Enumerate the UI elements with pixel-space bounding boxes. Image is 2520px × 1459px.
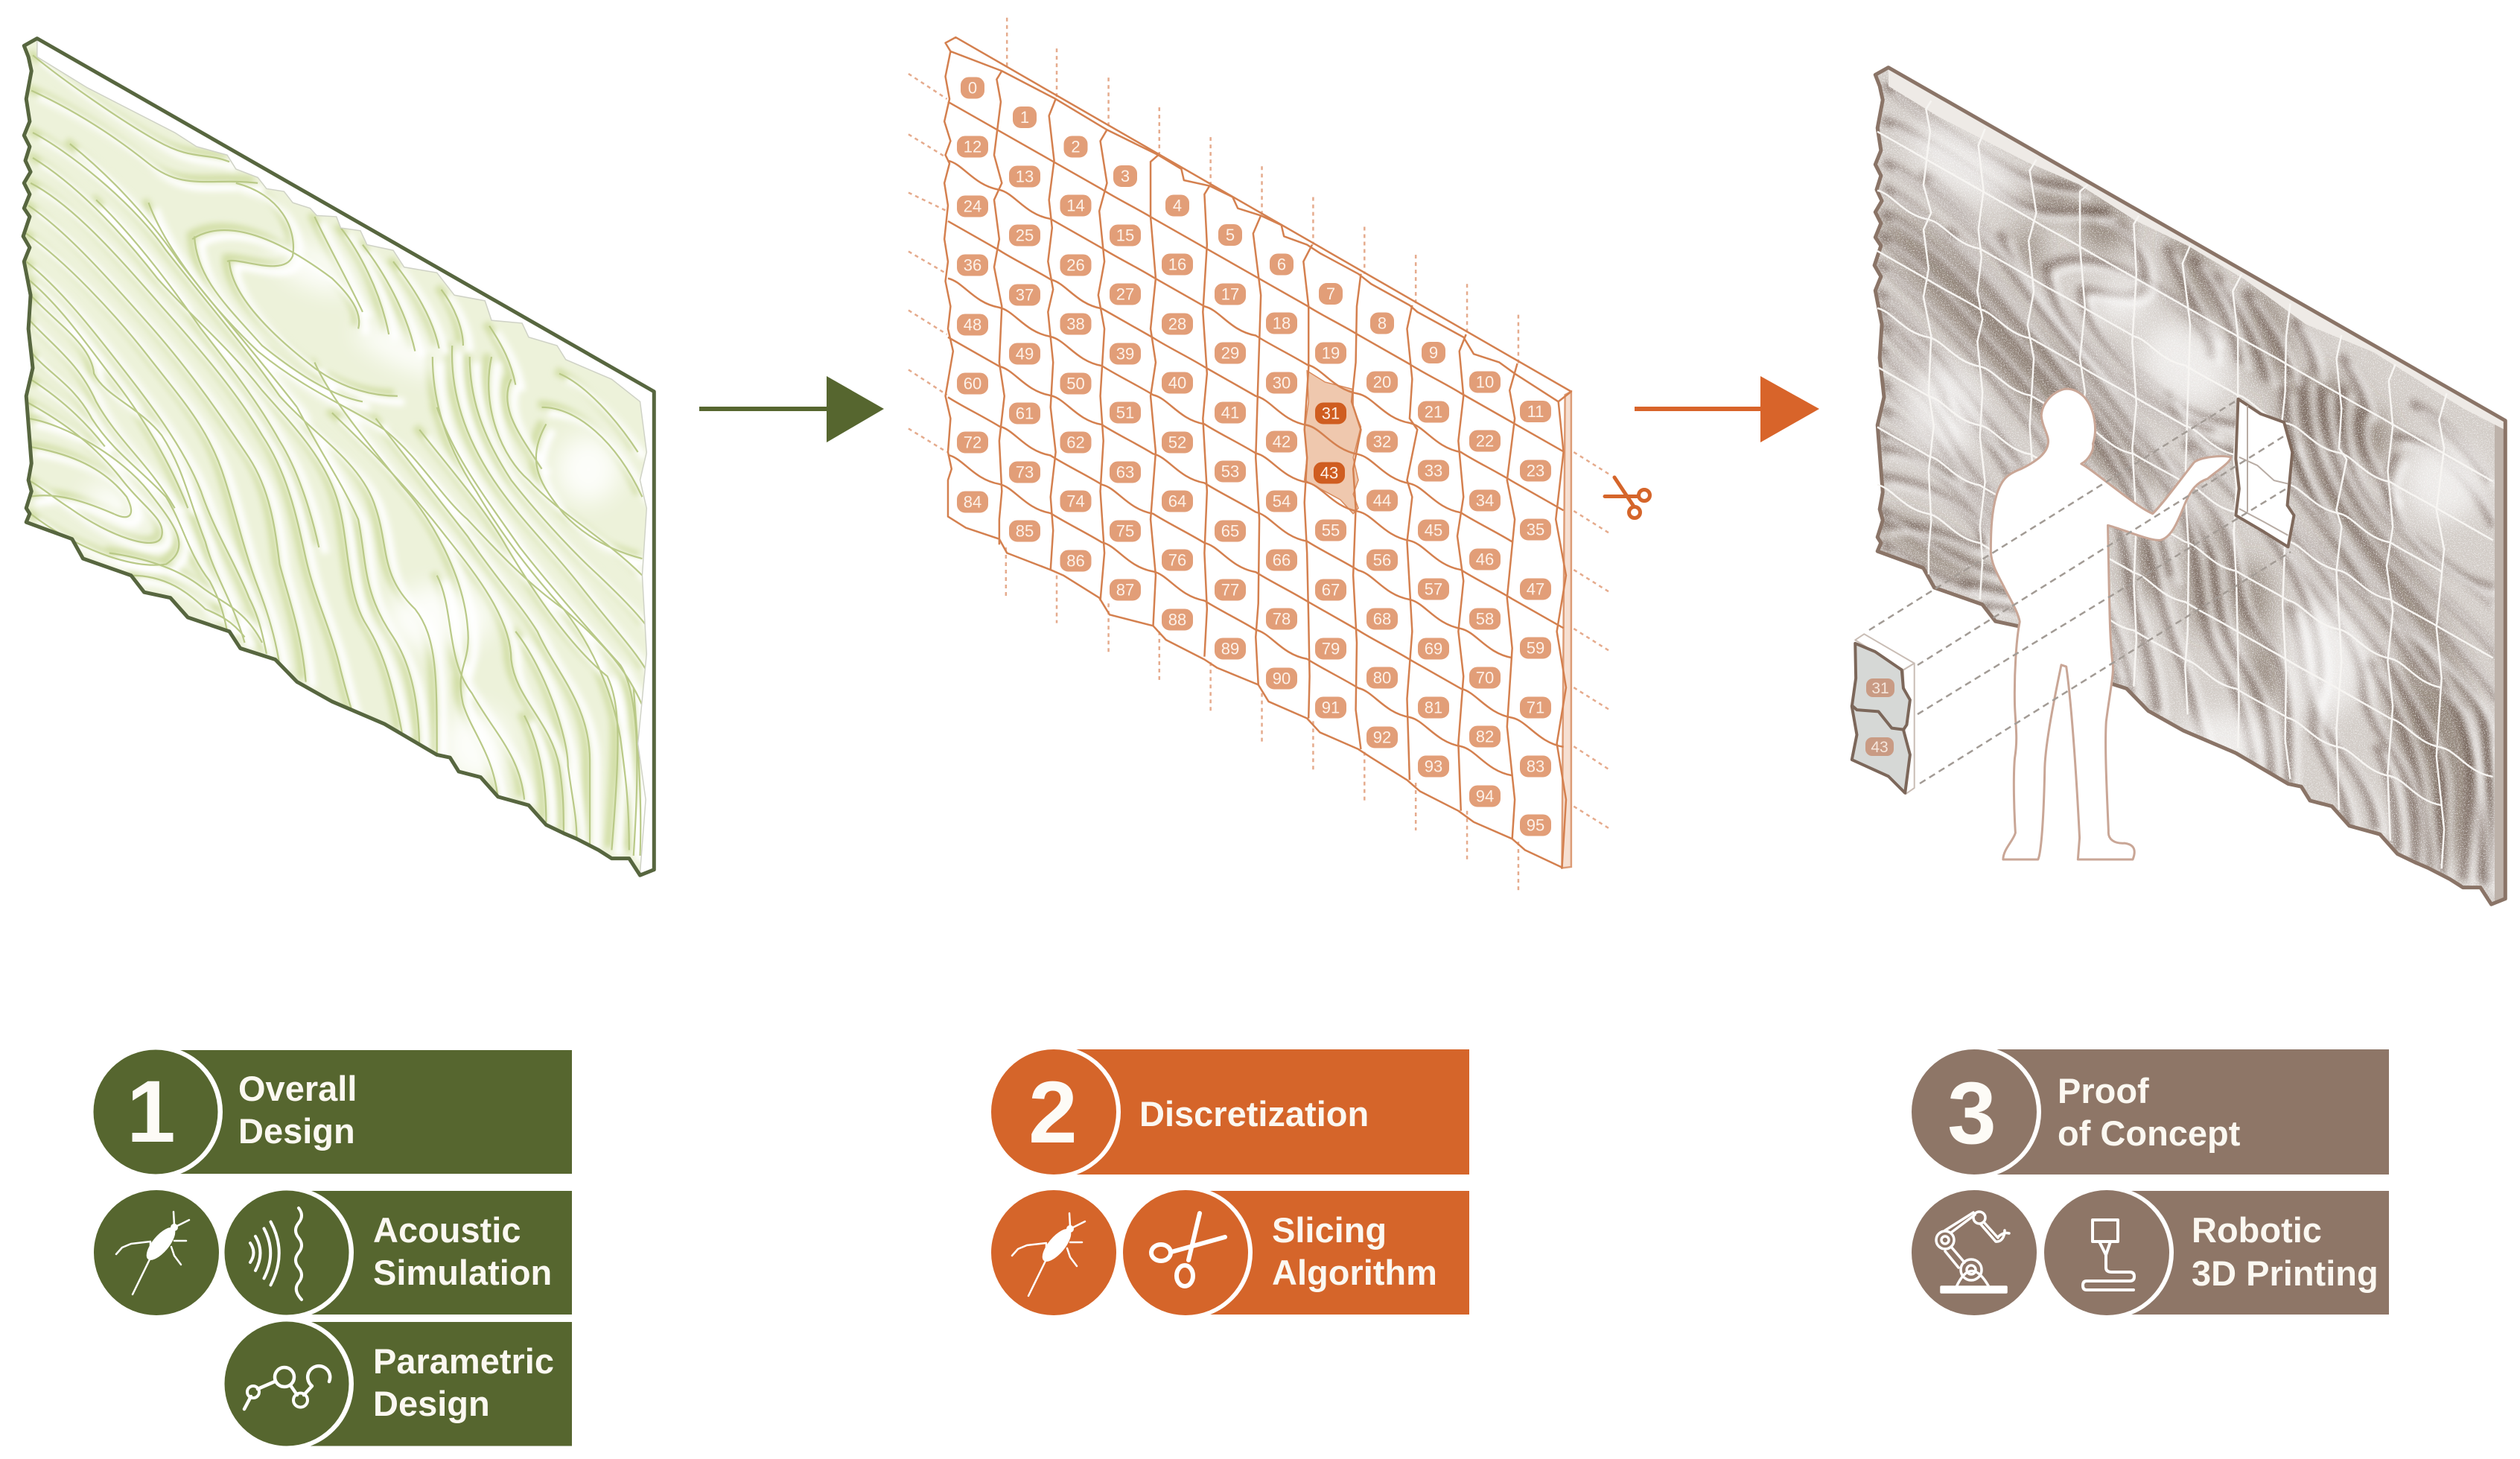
wall outline	[1874, 68, 2505, 904]
numbered panel labels: 56	[1373, 551, 1391, 569]
numbered panel labels: 45	[1425, 521, 1442, 539]
numbered panel labels: 79	[1322, 639, 1340, 658]
pale top strip	[37, 39, 655, 878]
numbered panel labels: 89	[1221, 639, 1239, 658]
bar: slicing algorithm: Slicing	[1272, 1210, 1387, 1250]
soft green shading beside contours	[22, 52, 643, 853]
bar: proof of concept: Proof	[2058, 1071, 2149, 1110]
bar: slicing algorithm	[1120, 1186, 1469, 1319]
bar: discretization: Discretization	[1139, 1094, 1369, 1134]
numbered panel labels: 95	[1527, 816, 1544, 834]
numbered panel labels: 46	[1476, 550, 1494, 569]
numbered panel labels: 31	[1322, 404, 1340, 423]
legend group 2: discretization	[988, 1046, 1469, 1319]
numbered panel labels: 37	[1016, 286, 1034, 304]
numbered panel labels: 84	[964, 493, 981, 511]
numbered panel labels: 1	[1020, 108, 1029, 127]
numbered panel labels: 39	[1116, 344, 1134, 363]
numbered panel labels: 49	[1016, 344, 1034, 363]
numbered panel labels: 87	[1116, 581, 1134, 599]
pale top strip	[1889, 68, 2507, 430]
extracted panels 31 and 43 block: 43	[1871, 739, 1889, 756]
numbered panel labels: 0	[968, 79, 977, 97]
numbered panel labels: 32	[1373, 432, 1391, 451]
numbered panel labels: 61	[1016, 404, 1034, 423]
numbered panel labels: 8	[1378, 314, 1387, 332]
numbered panel labels	[958, 77, 1550, 836]
numbered panel labels: 24	[964, 197, 981, 216]
numbered panel labels: 82	[1476, 727, 1494, 746]
dashed projection lines	[1869, 399, 2291, 783]
numbered panel labels: 76	[1168, 551, 1186, 569]
numbered panel labels: 72	[964, 433, 981, 451]
window left by removed panels	[2236, 399, 2294, 547]
numbered panel labels: 16	[1168, 255, 1186, 274]
numbered panel labels: 55	[1322, 521, 1340, 539]
numbered panel labels: 21	[1425, 402, 1442, 422]
numbered panel labels: 42	[1273, 432, 1291, 451]
numbered panel labels: 75	[1116, 521, 1134, 541]
light swirl ridges	[33, 61, 653, 862]
arrow: green	[699, 376, 884, 442]
green contour lines	[26, 55, 646, 856]
numbered panel labels: 22	[1476, 432, 1494, 450]
numbered panel labels: 93	[1425, 757, 1442, 776]
numbered panel labels: 2	[1071, 137, 1081, 156]
broad dark shaded zones	[1864, 177, 2476, 868]
wall outline	[23, 39, 654, 875]
numbered panel labels: 6	[1277, 255, 1286, 274]
numbered panel labels: 7	[1326, 285, 1335, 303]
numbered panel labels: 3	[1121, 167, 1130, 185]
bar: acoustic simulation: Acoustic	[373, 1210, 521, 1250]
dark shaded ridges	[1877, 84, 2498, 885]
bar: robotic 3d printing: 3D Printing	[2192, 1253, 2379, 1293]
icon: cricket	[991, 1190, 1116, 1315]
numbered panel labels: 20	[1373, 372, 1391, 392]
wall base tint	[15, 30, 663, 879]
numbered panel labels: 73	[1016, 463, 1034, 481]
bar: acoustic simulation: Simulation	[373, 1253, 552, 1292]
stone base tone	[1866, 59, 2514, 908]
bright swirl centres	[78, 232, 620, 782]
right side strip	[2495, 401, 2508, 923]
numbered panel labels: 30	[1273, 374, 1291, 392]
numbered panel labels: 26	[1066, 256, 1085, 274]
numbered panel labels: 27	[1116, 285, 1134, 304]
extracted panels 31 and 43 block	[1851, 634, 1915, 794]
numbered panel labels: 43	[1320, 463, 1338, 483]
numbered panel labels: 85	[1016, 521, 1034, 541]
icon: robot arm	[1912, 1190, 2037, 1315]
highlighted panels 31 and 43	[1305, 371, 1361, 514]
broad light zones	[1902, 109, 2485, 779]
numbered panel labels: 64	[1168, 492, 1186, 511]
numbered panel labels: 62	[1066, 433, 1085, 451]
numbered panel labels: 47	[1527, 579, 1544, 599]
bar: robotic 3d printing: Robotic	[2192, 1210, 2322, 1250]
numbered panel labels: 66	[1273, 551, 1291, 569]
numbered panel labels: 36	[964, 256, 981, 274]
numbered panel labels: 51	[1116, 404, 1134, 422]
bar: parametric design: Parametric	[373, 1341, 554, 1381]
numbered panel labels: 78	[1273, 609, 1291, 629]
bar: slicing algorithm: Algorithm	[1272, 1253, 1437, 1292]
numbered panel labels: 58	[1476, 609, 1494, 629]
numbered panel labels: 40	[1168, 374, 1186, 392]
bar: acoustic simulation	[221, 1186, 572, 1319]
numbered panel labels: 9	[1429, 343, 1438, 362]
bar: proof of concept: 3	[1947, 1064, 1996, 1163]
numbered panel labels: 94	[1476, 786, 1494, 806]
icon: cricket	[94, 1190, 219, 1315]
highlighted ridges	[1887, 92, 2507, 893]
bar: discretization	[988, 1046, 1469, 1178]
numbered panel labels: 81	[1425, 699, 1442, 716]
bar: parametric design	[221, 1317, 572, 1450]
numbered panel labels: 67	[1322, 581, 1340, 599]
numbered panel labels: 57	[1425, 579, 1442, 599]
numbered panel labels: 19	[1322, 344, 1340, 362]
panel: overall wall design	[15, 30, 663, 879]
white panel seams	[1877, 101, 2493, 868]
numbered panel labels: 52	[1168, 433, 1186, 451]
numbered panel labels: 38	[1066, 314, 1085, 334]
bar: parametric design: Design	[373, 1384, 490, 1423]
numbered panel labels: 83	[1527, 757, 1544, 776]
icon: scissors	[1151, 1213, 1225, 1286]
numbered panel labels: 15	[1116, 226, 1134, 244]
numbered panel labels: 74	[1066, 492, 1085, 511]
icon: sound waves on surface	[250, 1208, 302, 1300]
numbered panel labels: 48	[964, 316, 981, 334]
numbered panel labels: 41	[1221, 404, 1239, 422]
bar: overall design: 1	[127, 1063, 176, 1161]
bar: overall design	[90, 1046, 572, 1178]
numbered panel labels: 69	[1425, 639, 1442, 658]
numbered panel labels: 80	[1373, 669, 1391, 687]
numbered panel labels: 63	[1116, 463, 1134, 481]
bar: proof of concept: of Concept	[2058, 1113, 2241, 1153]
numbered panel labels: 86	[1066, 551, 1085, 570]
stipple grain	[1866, 59, 2514, 908]
numbered panel labels: 33	[1425, 462, 1442, 480]
numbered panel labels: 90	[1273, 669, 1291, 688]
grid lines	[948, 71, 1564, 839]
bar: proof of concept	[1909, 1046, 2389, 1178]
icon: 3d printer nozzle	[2083, 1220, 2134, 1290]
bar: overall design: Overall	[238, 1069, 357, 1108]
numbered panel labels: 29	[1221, 344, 1239, 362]
numbered panel labels: 53	[1221, 462, 1239, 481]
bar: overall design: Design	[238, 1111, 355, 1151]
numbered panel labels: 65	[1221, 521, 1239, 541]
numbered panel labels: 4	[1173, 197, 1182, 214]
numbered panel labels: 18	[1273, 314, 1291, 332]
numbered panel labels: 13	[1016, 167, 1034, 186]
extracted panels 31 and 43 block: 31	[1871, 680, 1889, 697]
numbered panel labels: 60	[964, 374, 981, 393]
arrow: orange	[1635, 376, 1819, 442]
numbered panel labels: 92	[1373, 728, 1391, 746]
numbered panel labels: 44	[1373, 492, 1391, 509]
numbered panel labels: 12	[964, 137, 981, 156]
numbered panel labels: 14	[1066, 197, 1085, 214]
numbered panel labels: 25	[1016, 226, 1034, 244]
numbered panel labels: 28	[1168, 314, 1186, 334]
legend group 1: overall design	[90, 1046, 572, 1450]
outer edges	[944, 37, 1571, 868]
bar: discretization: 2	[1028, 1064, 1078, 1162]
right side strip	[1562, 392, 1571, 868]
numbered panel labels: 88	[1168, 611, 1186, 629]
numbered panel labels: 77	[1221, 581, 1239, 599]
panel: discretized wall grid	[909, 18, 1650, 892]
panel: proof of concept wall	[1851, 59, 2514, 923]
numbered panel labels: 91	[1322, 699, 1340, 716]
numbered panel labels: 34	[1476, 492, 1494, 509]
numbered panel labels: 54	[1273, 492, 1291, 511]
numbered panel labels: 59	[1527, 639, 1544, 657]
numbered panel labels: 10	[1476, 372, 1494, 392]
numbered panel labels: 11	[1527, 402, 1544, 421]
icon: parametric nodes	[244, 1366, 330, 1409]
numbered panel labels: 68	[1373, 609, 1391, 629]
numbered panel labels: 50	[1066, 374, 1085, 393]
numbered panel labels: 23	[1527, 462, 1544, 480]
bar: robotic 3d printing	[2041, 1186, 2389, 1319]
person silhouette	[1991, 389, 2231, 859]
dashed slicing guides	[909, 18, 1610, 892]
numbered panel labels: 71	[1527, 699, 1544, 716]
numbered panel labels: 35	[1527, 520, 1544, 539]
numbered panel labels: 17	[1221, 285, 1239, 304]
icon: small scissors	[1605, 477, 1650, 518]
legend group 3: proof of concept	[1909, 1046, 2389, 1319]
numbered panel labels: 70	[1476, 669, 1494, 687]
numbered panel labels: 5	[1226, 226, 1235, 244]
